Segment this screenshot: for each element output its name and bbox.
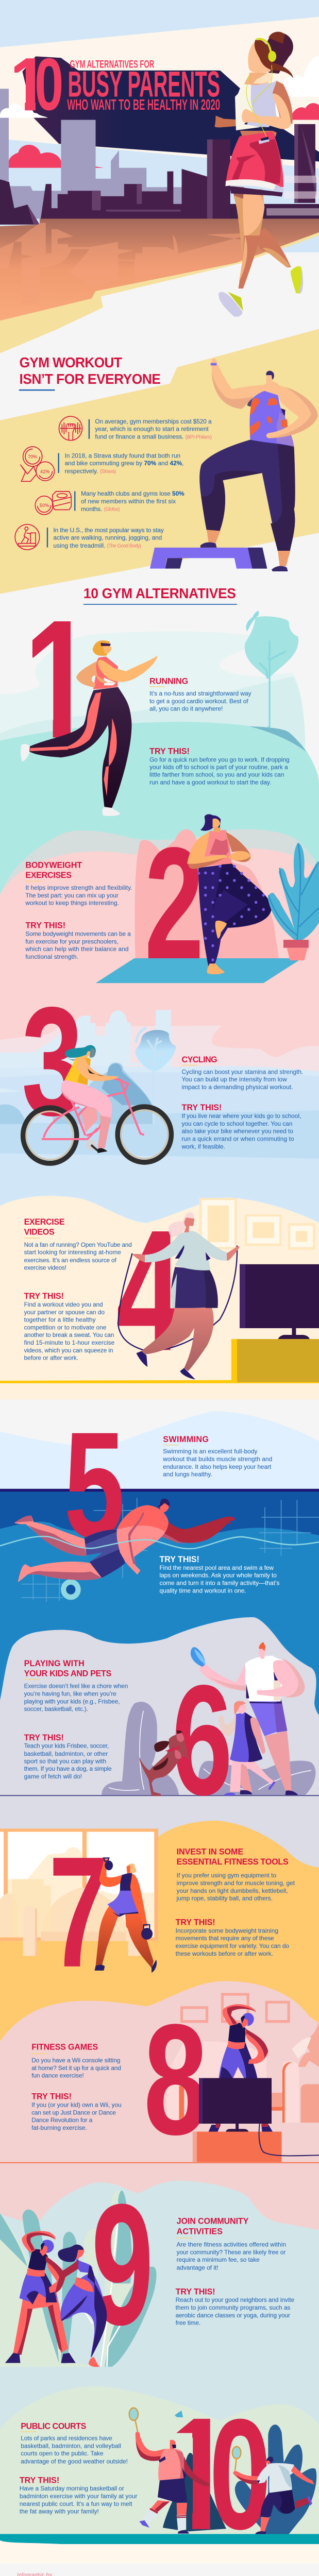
big number 10: 0 — [35, 44, 63, 126]
text: swimming: come and turn it into a family activity—that’s — [159, 1580, 279, 1587]
text: cycling: You can build up the intensity from low — [182, 1076, 287, 1083]
text: fitness games — [31, 2042, 122, 2131]
background: public courts — [0, 2386, 319, 2564]
alternative 3: cycling — [22, 975, 303, 1163]
text: cycling: CYCLING — [182, 1055, 217, 1064]
text: swimming: laps on weekends. Ask your whole family to — [159, 1571, 277, 1579]
text: swimming: endurance. It also helps keep your heart — [163, 1463, 272, 1470]
stat: members lost: Many health clubs and gyms lose 50% — [81, 490, 184, 497]
text: running: RUNNING — [149, 676, 188, 686]
text: fitness games: If you (or your kid) own a Wii, you — [31, 2101, 122, 2108]
text: fitness games: Do you have a Wii console sitting — [31, 2057, 120, 2064]
alternative 5: swimming — [0, 1401, 319, 1594]
illustration: woman on bicycle — [23, 1045, 171, 1163]
text: swimming: Swimming is an excellent full-body — [163, 1448, 257, 1455]
text: join community activities — [176, 2216, 295, 2327]
text: cycling: work, if feasible. — [181, 1143, 225, 1150]
text: join community activities: Reach out to your good neighbors and invite — [176, 2296, 295, 2303]
text: exercise videos: Find a workout video you and — [24, 1301, 103, 1308]
text: playing with kids and pets: basketball, badminton, or other — [24, 1750, 108, 1757]
text: playing with kids and pets: Teach your kids Frisbee, soccer, — [24, 1742, 109, 1750]
text: public courts: courts open to the public. Take — [21, 2450, 104, 2457]
stat: members lost: (Glofox) — [104, 506, 120, 512]
text: exercise videos: together for a little healthy — [24, 1316, 96, 1324]
illustration: background leaves — [102, 1702, 315, 1795]
stat: popular activities: (The Good Body) — [107, 543, 141, 549]
text: swimming: SWIMMING — [163, 1435, 209, 1444]
text: join community activities: Are there fitness activities offered within — [177, 2241, 286, 2248]
alternative 10: public courts — [18, 2407, 316, 2576]
text: public courts: Have a Saturday morning basketball or — [20, 2485, 124, 2492]
text: join community activities: free time. — [176, 2319, 200, 2327]
big number 7: 7 — [48, 1823, 110, 2000]
stat: popular activities: In the U.S., the most popular ways to stay — [53, 527, 164, 534]
big number 3: 3 — [22, 975, 83, 1148]
stat: membership cost: fund or finance a small business. — [95, 433, 183, 440]
text: bodyweight exercises: It helps improve strength and flexibility. — [25, 884, 132, 891]
background: swimming pool — [0, 1411, 319, 1729]
illustration: dancing women — [5, 2231, 107, 2367]
text: public courts: Lots of parks and residences have — [21, 2434, 112, 2442]
icon: scale, tape and 50% — [35, 492, 71, 515]
stat: members lost: months. — [81, 505, 102, 513]
text: bodyweight exercises: BODYWEIGHT — [25, 860, 82, 870]
text: public courts: TRY THIS! — [20, 2476, 59, 2485]
text: exercise videos: find 15-minute to 1-hour exercise — [24, 1339, 115, 1346]
heading: ISN’T FOR EVERYONE — [20, 371, 161, 387]
text: join community activities: them to join community programs, such as — [176, 2304, 290, 2311]
text: essential fitness tools: INVEST IN SOME — [177, 1847, 243, 1857]
stat: members lost — [35, 490, 184, 515]
background: cycling city — [0, 1010, 319, 1399]
text: running: all, you can do it anywhere! — [149, 705, 223, 713]
text: bodyweight exercises: workout to keep things interesting. — [25, 900, 119, 907]
text: running: little farther from school, so you and your kids can — [149, 771, 284, 778]
text: cycling: impact to a demanding physical workout. — [182, 1083, 293, 1091]
big number 4: 4 — [116, 1194, 182, 1387]
illustration: yoga woman on mat — [96, 814, 302, 983]
text: playing with kids and pets: Exercise doesn’t feel like a chore when — [24, 1683, 128, 1690]
text: essential fitness tools: ESSENTIAL FITNESS TOOLS — [177, 1857, 289, 1867]
stat: membership cost: On average, gym memberships cost $520 a — [95, 418, 212, 425]
text: cycling: also take your bike whenever you need to — [182, 1127, 293, 1135]
icon: running shoe with 70% and 42%: 70% — [28, 454, 37, 459]
heading — [19, 355, 161, 391]
text: exercise videos: exercise videos! — [24, 1264, 66, 1272]
stat: popular activities: active are walking, running, jogging, and — [53, 534, 162, 541]
text: cycling: TRY THIS! — [182, 1103, 222, 1112]
illustration: jogging woman — [21, 640, 158, 816]
background: playing section — [0, 1617, 319, 2059]
text: essential fitness tools: improve strength and for muscle toning, get — [177, 1879, 295, 1887]
text: public courts: advantage of the good weather outside! — [21, 2458, 128, 2465]
text: fitness games: at home? Set it up for a quick and — [31, 2064, 121, 2072]
text: essential fitness tools: If you prefer using gym equipment to — [177, 1872, 276, 1879]
text: exercise videos: before or after work. — [24, 1354, 78, 1362]
text: playing with kids and pets: playing with your kids (e.g., Frisbee, — [24, 1698, 120, 1705]
text: exercise videos: start looking for interesting at-home — [24, 1249, 121, 1256]
background: fitness games room — [0, 1981, 319, 2494]
text: exercise videos — [24, 1217, 132, 1362]
icon: scale, tape and 50%: 50% — [40, 503, 49, 508]
title line 3: WHO WANT TO BE HEALTHY IN 2020 — [67, 97, 220, 113]
text: playing with kids and pets — [24, 1659, 128, 1780]
illustration: woman skipping rope — [118, 1212, 240, 1380]
illustration: woman with kettlebells — [95, 1858, 157, 1973]
illustration: father, daughter and dog — [139, 1642, 305, 1796]
big number 1: 1 — [24, 585, 94, 774]
big number 9: 9 — [91, 2168, 154, 2361]
text: fitness games: Dance Revolution for a — [31, 2116, 93, 2124]
text: exercise videos: your partner or spouse can do — [24, 1309, 105, 1316]
stat: membership cost — [59, 416, 212, 440]
heading: 10 gym alternatives: 10 GYM ALTERNATIVES — [83, 585, 236, 601]
text: bodyweight exercises: TRY THIS! — [25, 921, 65, 930]
text: cycling: you can cycle to school together. You can — [182, 1120, 292, 1127]
illustration: man on step platform — [150, 358, 318, 571]
text: essential fitness tools: these workouts before or after work. — [176, 1950, 273, 1957]
text: public courts: the fat away with your family! — [20, 2507, 99, 2515]
stat: strava commuting — [20, 447, 183, 481]
text: exercise videos: VIDEOS — [24, 1227, 55, 1237]
illustration: swimmer — [14, 1499, 235, 1582]
illustration: woman dancing on television — [193, 2004, 319, 2162]
big number 8: 8 — [144, 1991, 208, 2167]
text: swimming: quality time and workout in one. — [159, 1587, 246, 1594]
big number 10 — [14, 58, 62, 110]
text: exercise videos: videos, which you can squeeze in — [24, 1347, 113, 1354]
text: join community activities: advantage of it! — [177, 2264, 219, 2271]
stat: strava commuting: and bike commuting grew by 70% and 42%, — [65, 460, 183, 467]
text: exercise videos: competition or to motivate one — [24, 1324, 107, 1331]
big number 10 — [163, 2384, 272, 2564]
background: hero — [0, 0, 319, 353]
text: join community activities: ACTIVITIES — [177, 2227, 223, 2236]
text: cycling: Cycling can boost your stamina and strength. — [182, 1068, 303, 1076]
text: playing with kids and pets: you’re having fun, like when you’re — [24, 1690, 116, 1697]
illustration: jogging woman — [214, 32, 303, 317]
text: bodyweight exercises: EXERCISES — [25, 871, 72, 880]
text: join community activities: JOIN COMMUNITY — [177, 2216, 248, 2226]
text: swimming: TRY THIS! — [159, 1555, 199, 1564]
text: playing with kids and pets: sport so that you can play with — [24, 1757, 106, 1765]
illustration: tropical leaves — [0, 2190, 157, 2367]
background: running park — [0, 632, 319, 1070]
text: running: your kids off to school is part of your routine, park a — [149, 764, 288, 771]
heading: GYM WORKOUT — [20, 355, 122, 370]
alternative 2: bodyweight exercises — [25, 814, 319, 992]
illustration: pink shrubs — [135, 829, 279, 958]
alternative 4: exercise videos — [0, 1194, 319, 1387]
text: fitness games: fun dance exercise! — [31, 2072, 84, 2079]
text: exercise videos: TRY THIS! — [24, 1292, 64, 1301]
text: fitness games: fat-burning exercise. — [31, 2124, 87, 2131]
text: bodyweight exercises: fun exercise for your preschoolers, — [25, 938, 119, 945]
text: playing with kids and pets: TRY THIS! — [24, 1733, 64, 1742]
text: swimming: workout that builds muscle strength and — [162, 1455, 272, 1463]
icon: running shoe with 70% and 42% — [20, 447, 54, 481]
text: exercise videos: EXERCISE — [24, 1217, 65, 1227]
big number 10: 1 — [10, 42, 48, 127]
stat: strava commuting: respectively. — [65, 467, 98, 474]
text: cycling: run a quick errand or when commuting to — [182, 1136, 294, 1143]
text: public courts: PUBLIC COURTS — [21, 2421, 86, 2431]
stat: popular activities: using the treadmill. — [53, 542, 105, 549]
text: join community activities: aerobic dance classes or yoga, during your — [176, 2312, 290, 2319]
text: exercise videos: another to break a sweat. You can — [24, 1331, 114, 1338]
stat: members lost: of new members within the first six — [81, 498, 176, 505]
text: playing with kids and pets: PLAYING WITH — [24, 1659, 85, 1668]
alternative 6: playing with kids and pets — [24, 1642, 315, 1828]
stat: membership cost: year, which is enough to start a retirement — [95, 426, 209, 433]
text: running: run and have a good workout to start the day. — [149, 778, 271, 786]
text: playing with kids and pets: soccer, basketball, etc.). — [24, 1705, 88, 1713]
illustration: dark leaves — [163, 2425, 316, 2534]
text: essential fitness tools: exercise equipment for variety. You can do — [176, 1942, 289, 1950]
icon: treadmill runner — [15, 524, 40, 550]
stat: popular activities — [15, 524, 164, 550]
text: public courts: badminton exercise with your family at your — [20, 2493, 137, 2500]
stat: strava commuting: In 2018, a Strava study found that both run — [65, 452, 180, 460]
stat: strava commuting: (Strava) — [100, 469, 116, 474]
text: essential fitness tools: jump rope, stability ball, and others. — [176, 1894, 273, 1902]
illustration: potted plant — [268, 843, 319, 960]
icon: dumbbell and fist — [59, 416, 82, 440]
text: running: It’s a no-fuss and straightforward way — [149, 690, 251, 697]
decorative lane line — [0, 1536, 319, 1549]
section: gym workout isn't for everyone — [15, 355, 318, 605]
text: join community activities: your community? These are likely free or — [177, 2248, 286, 2256]
text: essential fitness tools: Incorporate some bodyweight training — [176, 1927, 278, 1934]
big number 2: 2 — [145, 814, 204, 992]
illustration: television and cabinet — [0, 1264, 319, 1383]
text: public courts: nearest public court. It’s a fun way to melt — [20, 2500, 132, 2507]
text: join community activities: TRY THIS! — [176, 2287, 215, 2297]
text: fitness games: FITNESS GAMES — [31, 2042, 98, 2052]
text: running: TRY THIS! — [149, 747, 190, 756]
text: running — [149, 676, 290, 786]
alternative 1: running — [21, 585, 298, 816]
text: running: Go for a quick run before you go to work. If dropping — [149, 756, 290, 763]
text: playing with kids and pets: game of fetch will do! — [24, 1773, 82, 1780]
text: essential fitness tools: your hands on light dumbbells, kettlebell, — [177, 1887, 288, 1894]
stat: membership cost: (BPI-Philam) — [186, 434, 212, 440]
text: cycling: If you live near where your kids go to school, — [182, 1112, 301, 1120]
illustration: wall frames — [199, 1198, 315, 1250]
alternative 7: essential fitness tools — [48, 1823, 295, 2000]
text: bodyweight exercises: Some bodyweight movements can be a — [25, 930, 131, 938]
text: essential fitness tools — [176, 1847, 295, 1957]
text: bodyweight exercises: which can help with their balance and — [25, 945, 128, 953]
text: public courts: basketball, badminton, and volleyball — [21, 2442, 121, 2450]
text: public courts — [20, 2421, 137, 2515]
text: fitness games: TRY THIS! — [31, 2092, 72, 2101]
big number 5: 5 — [64, 1401, 125, 1569]
text: essential fitness tools: TRY THIS! — [176, 1918, 215, 1927]
big number 10: 0 — [209, 2386, 272, 2563]
big number 10: 1 — [163, 2384, 234, 2564]
text: swimming: Find the nearest pool area and swim a few — [159, 1564, 274, 1571]
text: swimming — [159, 1435, 279, 1594]
title line 1: GYM ALTERNATIVES FOR — [70, 58, 154, 71]
icon: running shoe with 70% and 42%: 42% — [40, 469, 49, 474]
alternative 8: fitness games — [31, 1991, 319, 2167]
text: running: to get a good cardio workout. Best of — [149, 698, 248, 705]
text: join community activities: require a minimum fee, so take — [177, 2256, 260, 2263]
text: cycling — [181, 1055, 303, 1150]
text: swimming: and lungs healthy. — [163, 1471, 212, 1478]
text: bodyweight exercises — [25, 860, 132, 960]
illustration: park tree — [245, 611, 298, 727]
icon: pool drain ring — [63, 1582, 78, 1597]
text: bodyweight exercises: functional strength. — [25, 953, 78, 960]
text: playing with kids and pets: YOUR KIDS AND PETS — [24, 1669, 111, 1679]
big number 6: 6 — [172, 1652, 232, 1828]
text: fitness games: can set up Just Dance or Dance — [31, 2109, 116, 2116]
text: essential fitness tools: movements that require any of these — [176, 1935, 274, 1942]
illustration: badminton players — [129, 2408, 314, 2534]
text: exercise videos: Not a fan of running? Open YouTube and — [24, 1241, 132, 1248]
text: bodyweight exercises: The best part: you can mix up your — [25, 892, 119, 899]
text: playing with kids and pets: them. If you have a dog, a simple — [24, 1765, 112, 1772]
background: gym workout band — [0, 329, 319, 594]
text: exercise videos: exercises. It’s an endless source of — [24, 1257, 116, 1264]
alternative 9: join community activities — [0, 2168, 295, 2367]
hero title — [14, 58, 220, 110]
